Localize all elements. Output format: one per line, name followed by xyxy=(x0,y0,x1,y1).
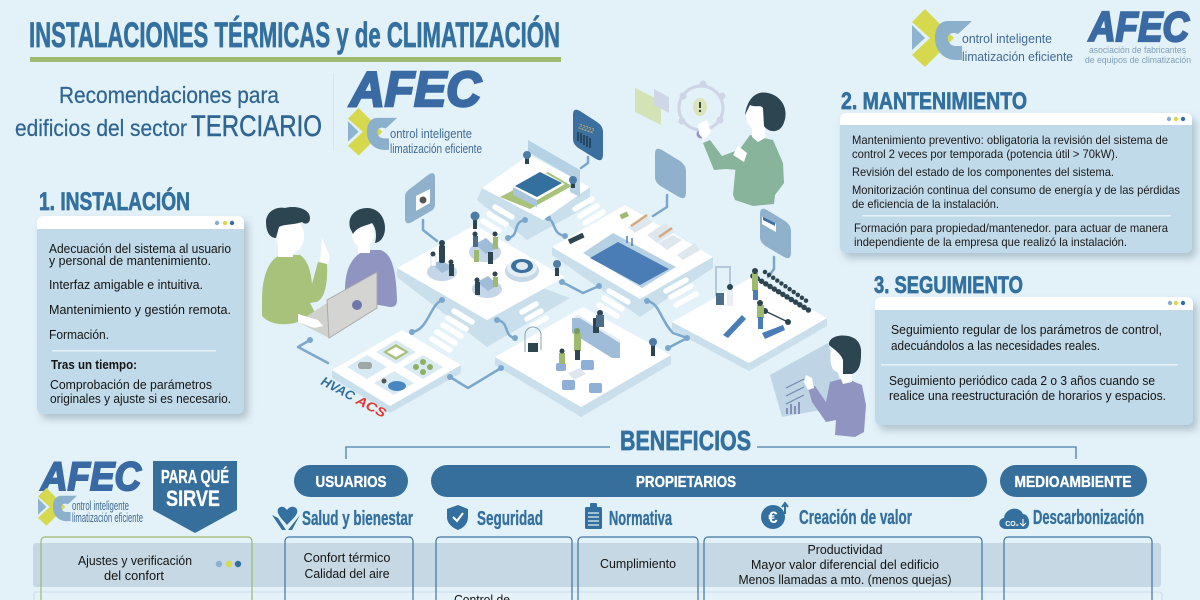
panel: 2 mantenimiento xyxy=(840,88,1192,253)
pool xyxy=(553,211,700,288)
cell: productividad: Mayor valor diferencial del edificio xyxy=(751,558,939,572)
sign: grey blue xyxy=(655,149,686,198)
text: instalación items: Formación. xyxy=(49,328,109,342)
text: mantenimiento items xyxy=(852,133,1180,249)
panel: 3 seguimiento xyxy=(874,272,1193,425)
subhead: descarbonización xyxy=(999,507,1144,529)
subhead: normativa xyxy=(585,503,673,530)
sign: air conditioner xyxy=(760,209,791,258)
logo: AFEC central: limatización eficiente xyxy=(390,141,482,156)
subhead: descarbonización: Descarbonización xyxy=(1033,507,1144,529)
platform shadows xyxy=(332,187,827,417)
text: instalación items: Tras un tiempo: xyxy=(51,358,137,372)
logo: AFEC top right xyxy=(1085,3,1191,65)
cell: productividad xyxy=(738,543,952,587)
floating panels and control ring xyxy=(635,80,726,138)
title: INSTALACIONES TÉRMICAS y de CLIMATIZACIÓN xyxy=(29,15,560,55)
platform: pool xyxy=(552,205,713,299)
cell: ajustes y verificación xyxy=(78,554,241,583)
person: woman in green pointing xyxy=(698,92,786,206)
heading: beneficios: BENEFICIOS xyxy=(620,425,751,456)
platform: reception xyxy=(495,307,671,407)
reception xyxy=(525,310,657,393)
cell: productividad: Productividad xyxy=(808,543,882,557)
text: seguimiento items: Seguimiento regular de los parámetros de control, xyxy=(891,323,1162,337)
person: man in green with laptop xyxy=(262,207,377,338)
logo: AFEC bottom left: limatización eficiente xyxy=(72,510,143,525)
subhead: normativa: Normativa xyxy=(609,508,673,530)
text: instalación items: y personal de mantenimiento. xyxy=(49,254,211,268)
logo: control inteligente top right xyxy=(912,9,1073,67)
logo: AFEC bottom left: AFEC xyxy=(40,455,142,499)
subhead: seguridad xyxy=(447,505,543,530)
platform: bedroom xyxy=(482,155,590,220)
sign: blue heating xyxy=(573,110,603,160)
cell: ajustes y verificación: Ajustes y verificación xyxy=(78,554,192,568)
sign: thermostat xyxy=(405,173,435,223)
platform: restaurant xyxy=(397,225,565,320)
text: mantenimiento items: Formación para propiedad/mantenedor. para actuar de manera xyxy=(854,221,1168,235)
pill: usuarios: USUARIOS xyxy=(316,474,387,491)
steps xyxy=(432,199,696,350)
subhead: descarbonización: CO₂ xyxy=(1005,521,1019,528)
subhead: seguridad: Seguridad xyxy=(477,508,543,530)
text: instalación items: Mantenimiento y gestión remota. xyxy=(49,303,231,317)
illustration: isometric building platforms xyxy=(262,80,866,437)
text: mantenimiento items: de eficiencia de la instalación. xyxy=(852,197,999,211)
icon: central sensor xyxy=(505,259,539,282)
badge: para qué sirve: PARA QUÉ xyxy=(161,466,229,487)
text: instalación items: Adecuación del sistema al usuario xyxy=(49,242,231,256)
text: mantenimiento items: Revisión del estado de los componentes del sistema. xyxy=(852,165,1114,179)
cell: confort térmico xyxy=(304,551,390,581)
text: instalación items: Comprobación de parámetros xyxy=(50,378,212,392)
HVAC tiles xyxy=(347,340,443,395)
row band: next row xyxy=(34,592,1162,600)
subhead: creación de valor: Creación de valor xyxy=(799,507,912,529)
table: benefits matrix xyxy=(33,537,1162,600)
pill: medioambiente: MEDIOAMBIENTE xyxy=(1014,474,1132,491)
pipes xyxy=(298,157,774,388)
subtitle xyxy=(15,82,322,143)
panel: 1 instalación xyxy=(37,186,244,414)
text: seguimiento items xyxy=(881,323,1178,403)
subtitle: edificios del sector xyxy=(15,115,187,141)
logo: AFEC central xyxy=(348,63,482,156)
heading: 2 mantenimiento: 2. MANTENIMIENTO xyxy=(841,88,1027,115)
badge: para qué sirve: SIRVE xyxy=(166,486,220,511)
platform: gym xyxy=(672,277,827,363)
logo: control inteligente top right: limatización eficiente xyxy=(962,49,1073,64)
logo: AFEC top right: asociación de fabricantes xyxy=(1089,45,1186,55)
person: woman in lavender xyxy=(345,208,397,307)
labels: HVAC and ACS: HVAC xyxy=(319,373,358,404)
cell: productividad: Menos llamadas a mto. (menos quejas) xyxy=(738,573,952,587)
subhead: salud y bienestar: Salud y bienestar xyxy=(302,508,413,530)
logo: AFEC bottom left xyxy=(38,455,143,526)
cell: confort térmico: Calidad del aire xyxy=(304,567,390,581)
sign: blue heating: 22222 xyxy=(577,123,595,135)
badge: para qué sirve xyxy=(153,461,237,533)
heading: beneficios xyxy=(346,425,1076,459)
labels: HVAC and ACS: ACS xyxy=(353,392,389,421)
logo: AFEC central: ontrol inteligente xyxy=(390,126,472,141)
cell: cumplimiento: Cumplimiento xyxy=(600,557,676,571)
column outlines xyxy=(41,537,1152,600)
subtitle: Recomendaciones para xyxy=(59,82,279,108)
pill: medioambiente xyxy=(1000,465,1147,497)
row band: confort xyxy=(33,543,1161,587)
logo: AFEC top right: de equipos de climatización xyxy=(1085,55,1191,65)
logo: AFEC bottom left: ontrol inteligente xyxy=(72,498,129,513)
heading: 1 instalación: 1. INSTALACIÓN xyxy=(39,186,190,216)
subtitle: TERCIARIO xyxy=(191,110,322,143)
pill: usuarios xyxy=(294,465,408,497)
heading: 3 seguimiento: 3. SEGUIMIENTO xyxy=(874,272,1023,299)
text: instalación items: Interfaz amigable e intuitiva. xyxy=(49,278,203,292)
cell: confort térmico: Confort térmico xyxy=(304,551,390,565)
gym xyxy=(716,267,810,339)
pill: propietarios xyxy=(431,465,987,497)
text: mantenimiento items: independiente de la empresa que realizó la instalación. xyxy=(854,235,1127,249)
subhead: creación de valor: € xyxy=(768,508,778,527)
text: instalación items xyxy=(49,242,231,406)
logo: AFEC central: AFEC xyxy=(349,63,482,117)
text: mantenimiento items: control 2 veces por temporada (potencia útil > 70kW). xyxy=(852,147,1118,161)
logo: control inteligente top right: ontrol inteligente xyxy=(962,31,1052,46)
pipe nodes xyxy=(307,215,690,380)
logo: AFEC top right: AFEC xyxy=(1088,3,1190,50)
restaurant tables xyxy=(427,212,502,298)
pill: propietarios: PROPIETARIOS xyxy=(636,474,736,491)
text: instalación items: originales y ajuste si es necesario. xyxy=(50,392,231,406)
subhead: salud y bienestar xyxy=(272,507,413,530)
labels: HVAC and ACS xyxy=(319,373,389,421)
cell: ajustes y verificación: del confort xyxy=(104,569,165,583)
text: mantenimiento items: Mantenimiento preventivo: obligatoria la revisión del sistema de xyxy=(852,133,1168,147)
platform: HVAC ACS xyxy=(332,330,461,406)
text: seguimiento items: adecuándolos a las necesidades reales. xyxy=(891,339,1100,353)
text: seguimiento items: realice una reestructuración de horarios y espacios. xyxy=(889,389,1166,403)
title xyxy=(29,15,561,62)
person: man adjusting panel xyxy=(770,335,866,437)
text: seguimiento items: Seguimiento periódico cada 2 o 3 años cuando se xyxy=(889,374,1155,388)
bedroom furniture xyxy=(500,140,580,209)
subhead: creación de valor xyxy=(761,503,912,529)
text: mantenimiento items: Monitorización continua del consumo de energía y de las pérdidas xyxy=(852,183,1180,197)
